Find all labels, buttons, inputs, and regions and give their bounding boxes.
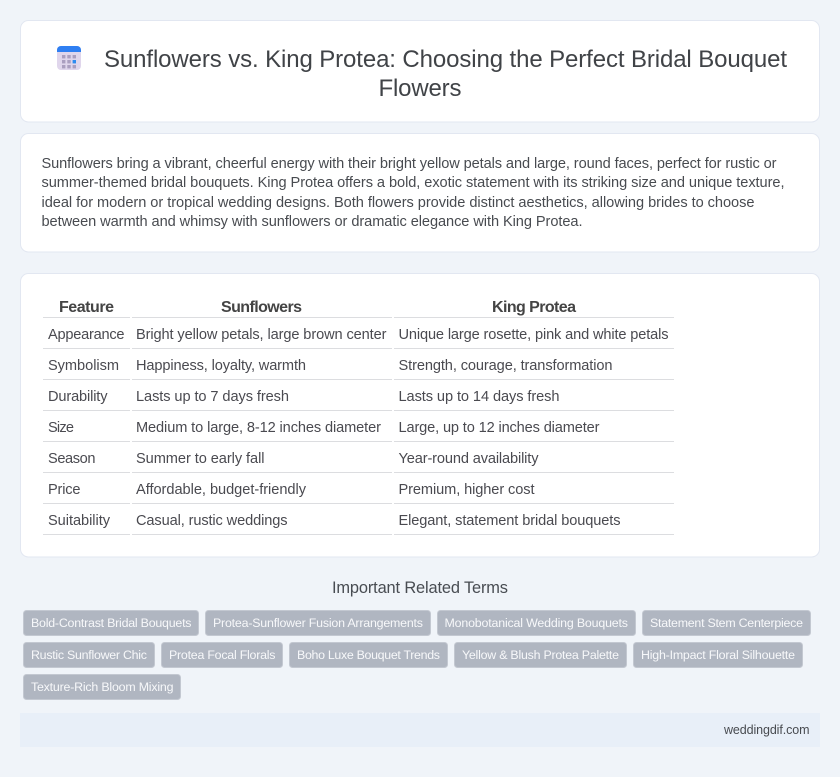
tag	[24, 642, 154, 668]
related terms tags	[24, 610, 810, 700]
table header	[59, 299, 576, 316]
panel: comparison table	[20, 274, 820, 557]
row: season: Summer to early fall	[136, 451, 264, 467]
row: appearance	[48, 327, 668, 343]
text block: intro: Sunflowers bring a vibrant, cheerful energy with their bright yellow petals and large, round faces, perfect for rustic or	[42, 156, 777, 172]
row: suitability: Casual, rustic weddings	[136, 513, 288, 529]
title: Flowers	[378, 75, 462, 102]
row: suitability: Suitability	[48, 513, 111, 529]
panel: title card	[20, 20, 820, 122]
table header: Sunflowers	[221, 299, 302, 316]
text block: intro: ideal for modern or tropical wedding designs. Both flowers provide distinct aesthetics, allowing brides to choose	[42, 195, 754, 211]
row: price: Affordable, budget-friendly	[136, 482, 307, 498]
row: suitability	[48, 513, 620, 529]
tag: Rustic Sunflower Chic	[31, 648, 147, 662]
tag	[642, 610, 810, 636]
tag: Statement Stem Centerpiece	[650, 616, 803, 630]
title: Sunflowers vs. King Protea: Choosing the Perfect Bridal Bouquet	[104, 46, 787, 73]
row: durability: Durability	[48, 389, 108, 405]
tag	[438, 610, 636, 636]
row: symbolism: Happiness, loyalty, warmth	[136, 358, 306, 374]
tag	[24, 674, 180, 700]
row: price: Premium, higher cost	[398, 482, 534, 498]
text block: intro	[42, 156, 784, 230]
row: symbolism	[48, 358, 612, 374]
footer bar: weddingdif.com	[723, 723, 810, 737]
row: appearance: Appearance	[48, 327, 124, 343]
tag	[24, 610, 198, 636]
row: durability	[48, 389, 560, 405]
icon: calendar	[57, 46, 81, 70]
tag: Texture-Rich Bloom Mixing	[31, 680, 174, 694]
tag: Protea Focal Florals	[169, 648, 276, 662]
tag: High-Impact Floral Silhouette	[641, 648, 795, 662]
row: size: Medium to large, 8-12 inches diameter	[136, 420, 381, 436]
tag	[206, 610, 430, 636]
table header: King Protea	[492, 299, 576, 316]
text block: intro: between warmth and whimsy with sunflowers or dramatic elegance with King Protea.	[42, 214, 582, 230]
tag: Monobotanical Wedding Bouquets	[444, 616, 628, 630]
row: size: Large, up to 12 inches diameter	[398, 420, 600, 436]
row: durability: Lasts up to 14 days fresh	[398, 389, 560, 405]
row: price: Price	[48, 482, 80, 498]
text block: intro: summer-themed bridal bouquets. King Protea offers a bold, exotic statement with its striking size and unique texture,	[42, 175, 784, 191]
row: appearance: Bright yellow petals, large brown center	[136, 327, 387, 343]
row: season	[48, 451, 539, 467]
row: size	[48, 420, 600, 436]
row: season: Year-round availability	[398, 451, 539, 467]
tag	[634, 642, 802, 668]
row: symbolism: Symbolism	[48, 358, 119, 374]
row: season: Season	[48, 451, 96, 467]
row: price	[48, 482, 534, 498]
tag: Boho Luxe Bouquet Trends	[297, 648, 440, 662]
tag	[290, 642, 448, 668]
footer bar	[20, 713, 820, 747]
title	[104, 46, 787, 102]
tag	[162, 642, 282, 668]
row: symbolism: Strength, courage, transformation	[398, 358, 612, 374]
table rules	[43, 317, 674, 535]
tag: Protea-Sunflower Fusion Arrangements	[213, 616, 423, 630]
tag: Yellow & Blush Protea Palette	[462, 648, 619, 662]
row: size: Size	[48, 420, 74, 436]
row: appearance: Unique large rosette, pink and white petals	[398, 327, 668, 343]
tag	[454, 642, 626, 668]
tag: Bold-Contrast Bridal Bouquets	[31, 616, 192, 630]
table header: Feature	[59, 299, 114, 316]
row: suitability: Elegant, statement bridal bouquets	[398, 513, 620, 529]
heading: related terms: Important Related Terms	[332, 579, 508, 597]
row: durability: Lasts up to 7 days fresh	[136, 389, 289, 405]
panel: intro paragraph	[20, 134, 820, 252]
